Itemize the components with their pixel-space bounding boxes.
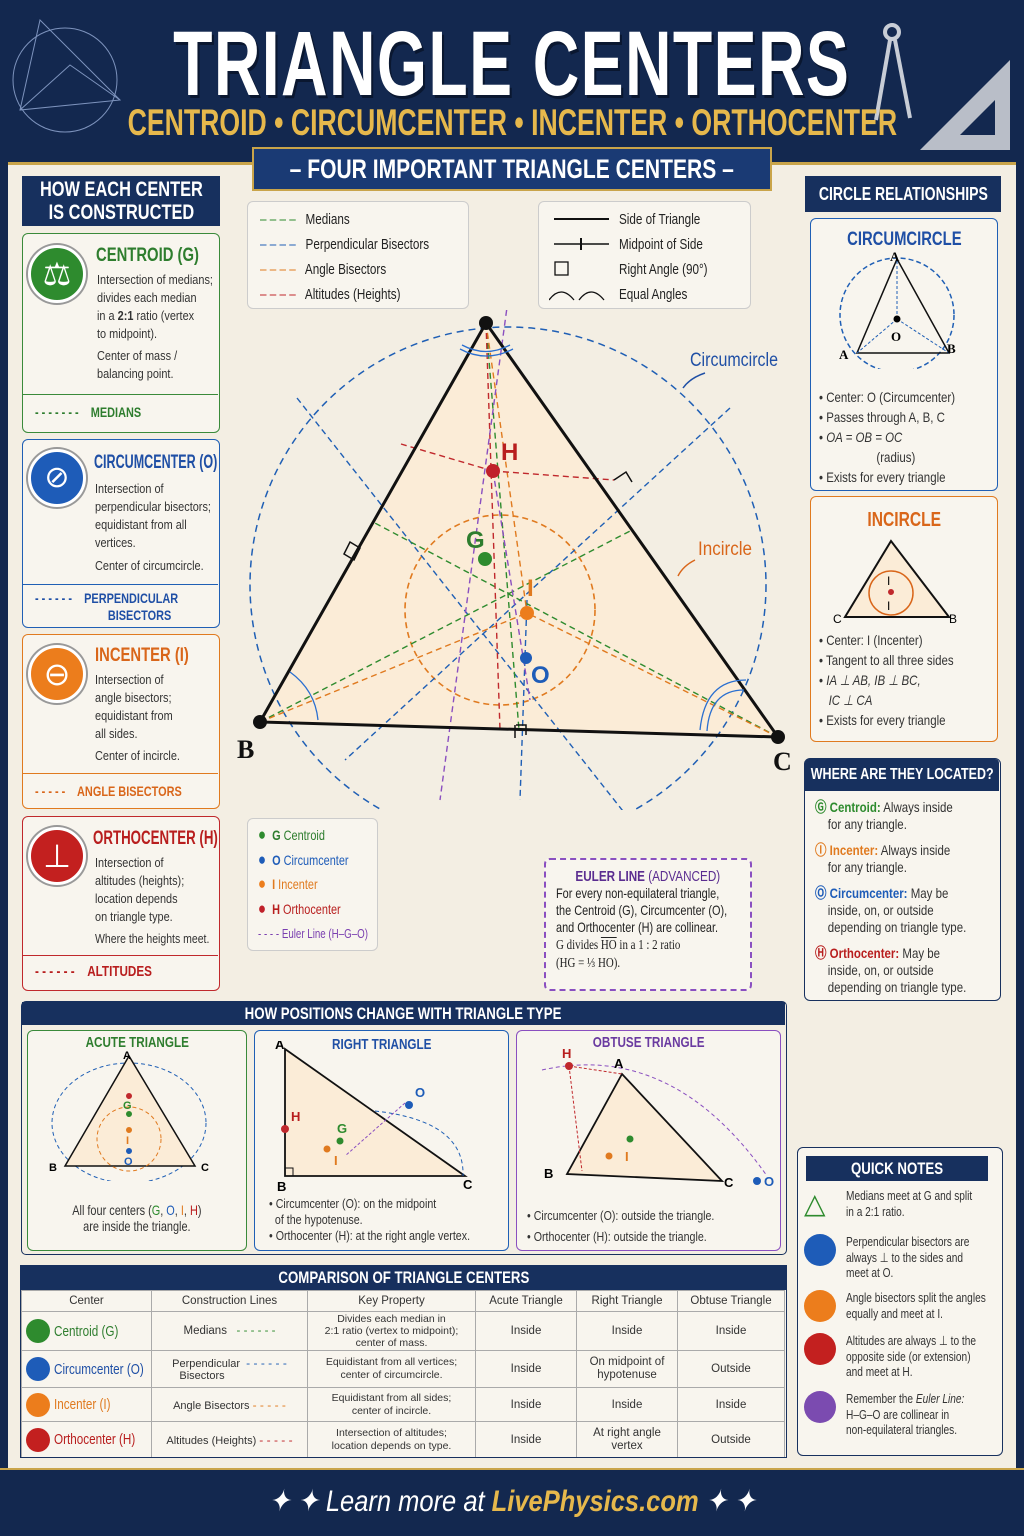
icon: compass	[28, 449, 86, 507]
comparison table: COMPARISON OF TRIANGLE CENTERS	[278, 1268, 529, 1287]
panel: incircle: • Tangent to all three sides	[819, 652, 954, 668]
panel: obtuse: B	[544, 1166, 553, 1181]
comparison table: Inside	[716, 1325, 746, 1337]
comparison table: location depends on type.	[332, 1440, 451, 1452]
ribbon banner: – FOUR IMPORTANT TRIANGLE CENTERS –	[290, 154, 734, 184]
circumcircle diagram: A	[839, 347, 849, 362]
subtitle: CENTROID • CIRCUMCENTER • INCENTER • ORTHOCENTER	[127, 102, 897, 143]
circumcircle diagram: A	[890, 249, 900, 264]
main diagram: H	[501, 439, 518, 466]
main diagram: Circumcircle	[690, 350, 778, 371]
legend: line types: – – – – Angle Bisectors	[260, 261, 386, 278]
legend: center points	[247, 818, 378, 951]
panel: where located: for any triangle.	[828, 816, 907, 832]
comparison table: At right angle	[593, 1426, 661, 1438]
panel: orthocenter: - - - - - - ALTITUDES	[35, 963, 152, 980]
legend: line types: – – – – Perpendicular Bisectors	[260, 236, 429, 253]
icon: compass: ⊘	[44, 461, 70, 494]
panel: circumcircle: (radius)	[876, 449, 915, 465]
legend: symbols: Side of Triangle	[619, 211, 700, 228]
panel: quick notes: Altitudes are always ⊥ to the	[846, 1333, 976, 1348]
main diagram: B	[237, 735, 254, 764]
section: how positions change: HOW POSITIONS CHANGE WITH TRIANGLE TYPE	[245, 1004, 562, 1022]
panel: where located: for any triangle.	[828, 859, 907, 875]
panel: circumcircle: • Exists for every triangle	[819, 469, 946, 485]
panel: quick notes	[797, 1147, 1003, 1456]
panel: incenter: angle bisectors;	[95, 690, 171, 705]
circumcircle diagram	[839, 249, 956, 369]
panel: where located: Ⓘ Incenter: Always inside	[815, 842, 950, 858]
panel: acute: are inside the triangle.	[83, 1218, 191, 1234]
comparison table: Outside	[711, 1363, 751, 1375]
incircle diagram	[833, 539, 957, 625]
panel: where located: depending on triangle type.	[828, 979, 966, 995]
incircle diagram: I	[887, 574, 890, 588]
panel: circumcenter: Intersection of	[95, 481, 164, 496]
comparison table: Outside	[711, 1434, 751, 1446]
callout: euler line	[544, 858, 752, 991]
comparison table: Inside	[612, 1325, 642, 1337]
panel: quick notes: Remember the Euler Line:	[846, 1391, 964, 1406]
comparison table: Perpendicular - - - - - -	[172, 1356, 287, 1370]
comparison table: Equidistant from all vertices;	[326, 1356, 457, 1368]
legend: center points: ● H Orthocenter	[258, 898, 341, 918]
comparison table: Right Triangle	[592, 1295, 662, 1307]
panel: centroid: - - - - - - - MEDIANS	[35, 404, 141, 420]
main diagram: C	[773, 747, 792, 776]
panel: circumcenter: perpendicular bisectors;	[95, 499, 211, 514]
right header: CIRCLE RELATIONSHIPS	[818, 184, 988, 204]
panel: centroid: to midpoint).	[97, 326, 157, 341]
comparison table: Centroid (G)	[54, 1322, 119, 1340]
panel: circumcenter	[22, 439, 220, 628]
panel: orthocenter: Intersection of	[95, 855, 164, 870]
comparison table: center of circumcircle.	[340, 1369, 443, 1381]
panel: centroid: in a 2:1 ratio (vertex	[97, 308, 194, 323]
panel: quick notes: Medians meet at G and split	[846, 1188, 972, 1203]
panel: orthocenter: Where the heights meet.	[95, 932, 209, 946]
panel: obtuse: O	[764, 1174, 774, 1189]
comparison table: On midpoint of	[590, 1356, 664, 1368]
panel: quick notes: opposite side (or extension)	[846, 1348, 971, 1364]
decorative left drawing	[12, 19, 121, 132]
panel: where located: WHERE ARE THEY LOCATED?	[811, 766, 993, 783]
panel: acute: O	[124, 1156, 133, 1168]
comparison table	[20, 1265, 787, 1458]
comparison table: Intersection of altitudes;	[336, 1426, 447, 1438]
panel: quick notes: H–G–O are collinear in	[846, 1406, 949, 1422]
icon: scale: ⚖	[43, 256, 71, 292]
comparison table: Obtuse Triangle	[690, 1295, 772, 1307]
panel: right: H	[291, 1109, 300, 1124]
circumcircle diagram: B	[947, 341, 956, 356]
panel: incircle: • Exists for every triangle	[819, 712, 946, 728]
icon: altitude: ⊥	[43, 838, 71, 874]
section: how positions change	[21, 1001, 787, 1255]
panel: acute: C	[201, 1162, 209, 1174]
panel: quick notes: in a 2:1 ratio.	[846, 1204, 905, 1218]
legend: symbols: Right Angle (90°)	[619, 261, 708, 278]
callout: euler line: the Centroid (G), Circumcenter (O),	[556, 902, 727, 918]
panel: orthocenter: on triangle type.	[95, 909, 173, 924]
icon: incircle	[28, 645, 86, 703]
comparison table: Angle Bisectors - - - - -	[173, 1398, 286, 1412]
panel: circumcenter: - - - - - - PERPENDICULAR	[35, 590, 178, 606]
panel: incircle: INCIRCLE	[867, 509, 941, 531]
legend: symbols: Equal Angles	[619, 286, 687, 303]
panel: acute: G	[123, 1100, 132, 1112]
comparison table: vertex	[611, 1440, 643, 1452]
panel: circumcenter: equidistant from all	[95, 517, 187, 532]
comparison table: 2:1 ratio (vertex to midpoint);	[325, 1325, 458, 1337]
main diagram: O	[531, 662, 550, 689]
panel: incircle: • Center: I (Incenter)	[819, 632, 923, 648]
panel: obtuse	[516, 1030, 781, 1251]
panel: centroid	[22, 233, 220, 433]
header background	[0, 0, 1024, 165]
panel: quick notes: QUICK NOTES	[851, 1158, 943, 1178]
panel: where located	[804, 758, 1001, 1001]
comparison table: Inside	[612, 1398, 642, 1410]
panel: centroid: divides each median	[97, 290, 197, 305]
comparison table: center of mass.	[356, 1337, 427, 1349]
panel: acute	[27, 1030, 247, 1251]
callout: euler line: EULER LINE (ADVANCED)	[576, 868, 720, 885]
panel: obtuse: A	[614, 1056, 624, 1071]
panel: quick notes: meet at O.	[846, 1265, 893, 1280]
panel: obtuse: C	[724, 1175, 734, 1190]
panel: quick notes: Angle bisectors split the angles	[846, 1290, 986, 1305]
panel: orthocenter: ORTHOCENTER (H)	[93, 828, 218, 849]
ribbon banner	[252, 147, 772, 191]
panel: incenter: Center of incircle.	[95, 748, 180, 763]
legend: line types: – – – – Medians	[260, 211, 350, 228]
icon: altitude	[28, 827, 86, 885]
left column header: HOW EACH CENTER	[40, 178, 202, 201]
comparison table: Acute Triangle	[489, 1295, 563, 1307]
title: TRIANGLE CENTERS	[173, 13, 851, 115]
panel: right: I	[334, 1153, 338, 1168]
comparison table: Bisectors	[179, 1370, 225, 1382]
panel: acute: I	[126, 1135, 129, 1147]
panel: incircle: IC ⊥ CA	[829, 692, 872, 708]
panel: obtuse: OBTUSE TRIANGLE	[593, 1034, 704, 1051]
legend: center points: ● G Centroid	[258, 825, 325, 844]
comparison table: Equidistant from all sides;	[332, 1392, 451, 1404]
panel: centroid: Intersection of medians;	[97, 272, 213, 287]
left column header: IS CONSTRUCTED	[48, 201, 194, 224]
circumcircle diagram: O	[891, 329, 901, 344]
comparison table: Incenter (I)	[54, 1396, 111, 1413]
callout: euler line: and Orthocenter (H) are collinear.	[556, 919, 718, 935]
legend: symbols	[538, 201, 751, 309]
legend: center points: - - - - Euler Line (H–G–O)	[258, 927, 368, 941]
callout: euler line: For every non-equilateral triangle,	[556, 885, 719, 901]
panel: quick notes: non-equilateral triangles.	[846, 1422, 957, 1437]
panel: circumcenter: BISECTORS	[108, 607, 171, 623]
panel: acute: All four centers (G, O, I, H)	[72, 1202, 202, 1218]
panel: obtuse: I	[625, 1149, 629, 1164]
panel: circumcenter: CIRCUMCENTER (O)	[94, 452, 217, 473]
panel: quick notes: always ⊥ to the sides and	[846, 1250, 963, 1264]
left column header	[22, 176, 220, 226]
comparison table: Inside	[511, 1398, 541, 1410]
comparison table: Circumcenter (O)	[54, 1360, 144, 1378]
comparison table: Altitudes (Heights) - - - - -	[166, 1432, 293, 1446]
panel: where located: depending on triangle type.	[828, 919, 966, 935]
comparison table: Inside	[716, 1398, 746, 1410]
comparison table: Divides each median in	[337, 1313, 446, 1325]
panel: incenter: equidistant from	[95, 708, 173, 723]
panel: quick notes: Perpendicular bisectors are	[846, 1234, 969, 1249]
panel: circumcircle: • Center: O (Circumcenter)	[819, 389, 955, 405]
panel: incenter	[22, 634, 220, 809]
panel: obtuse: • Circumcenter (O): outside the triangle.	[527, 1208, 714, 1223]
panel: quick notes: △	[804, 1188, 826, 1219]
panel: quick notes: and meet at H.	[846, 1364, 913, 1379]
footer	[0, 1468, 1024, 1536]
panel: orthocenter: location depends	[95, 891, 178, 906]
legend: line types	[247, 201, 469, 309]
comparison table: Construction Lines	[182, 1295, 277, 1307]
legend: symbols: Midpoint of Side	[619, 236, 703, 253]
comparison table: Orthocenter (H)	[54, 1431, 136, 1448]
main diagram: G	[466, 527, 485, 554]
legend: center points: ● O Circumcenter	[258, 850, 349, 868]
icon: incircle: ⊖	[44, 656, 70, 692]
panel: obtuse: • Orthocenter (H): outside the triangle.	[527, 1229, 707, 1244]
panel: incenter: Intersection of	[95, 672, 164, 687]
panel: where located: Ⓞ Circumcenter: May be	[815, 885, 948, 901]
main diagram: Incircle	[698, 539, 752, 560]
incircle diagram: I	[887, 599, 890, 613]
panel: circumcenter: vertices.	[95, 535, 136, 550]
comparison table: hypotenuse	[597, 1369, 657, 1381]
panel: incenter: INCENTER (I)	[95, 645, 189, 666]
right header	[805, 176, 1001, 212]
comparison table: Inside	[511, 1434, 541, 1446]
callout: euler line: (HG = ⅓ HO).	[556, 956, 620, 971]
panel: where located: Ⓖ Centroid: Always inside	[815, 799, 953, 815]
panel: orthocenter	[22, 816, 220, 991]
panel: centroid: Center of mass /	[97, 348, 177, 363]
panel: right: RIGHT TRIANGLE	[332, 1036, 431, 1053]
panel: right	[254, 1030, 509, 1251]
icon: scale	[28, 245, 86, 303]
panel: right: • Orthocenter (H): at the right angle vertex.	[269, 1228, 470, 1243]
footer: ✦ ✦ Learn more at LivePhysics.com ✦ ✦	[269, 1485, 755, 1518]
panel: where located: Ⓗ Orthocenter: May be	[815, 945, 940, 961]
comparison table: Medians - - - - - -	[183, 1325, 276, 1337]
panel: acute: B	[49, 1162, 57, 1174]
comparison table: Key Property	[358, 1295, 425, 1307]
panel: acute: ACUTE TRIANGLE	[85, 1034, 189, 1051]
panel: circumcircle: • OA = OB = OC	[819, 429, 902, 445]
comparison table: Inside	[511, 1363, 541, 1375]
panel: orthocenter: altitudes (heights);	[95, 873, 184, 888]
icon: compass and set square	[874, 23, 1010, 150]
comparison table: Center	[69, 1295, 104, 1307]
panel: right: G	[337, 1121, 347, 1136]
legend: center points: ● I Incenter	[258, 874, 318, 893]
panel: centroid: CENTROID (G)	[96, 245, 199, 266]
panel: circumcenter: Center of circumcircle.	[95, 558, 204, 573]
panel: incircle	[810, 496, 998, 742]
panel: centroid: balancing point.	[97, 366, 174, 381]
comparison table: Inside	[511, 1325, 541, 1337]
panel: where located: inside, on, or outside	[828, 962, 934, 978]
panel: right: O	[415, 1085, 425, 1100]
panel: obtuse: H	[562, 1046, 571, 1061]
panel: right: of the hypotenuse.	[275, 1212, 363, 1227]
comparison table: center of incircle.	[352, 1404, 431, 1416]
callout: euler line: G divides HO in a 1 : 2 ratio	[556, 938, 680, 953]
panel: where located: inside, on, or outside	[828, 902, 934, 918]
panel: circumcircle: • Passes through A, B, C	[819, 409, 945, 425]
main diagram: I	[527, 575, 534, 602]
legend: line types: – – – – Altitudes (Heights)	[260, 286, 400, 303]
panel: incircle: • IA ⊥ AB, IB ⊥ BC,	[819, 672, 921, 688]
panel: circumcircle: CIRCUMCIRCLE	[847, 229, 961, 250]
panel: incenter: - - - - - ANGLE BISECTORS	[35, 783, 182, 799]
main diagram	[237, 310, 792, 810]
panel: circumcircle	[810, 218, 998, 491]
panel: quick notes: equally and meet at I.	[846, 1306, 943, 1320]
panel: right: • Circumcenter (O): on the midpoint	[269, 1196, 436, 1211]
panel: incenter: all sides.	[95, 726, 137, 741]
